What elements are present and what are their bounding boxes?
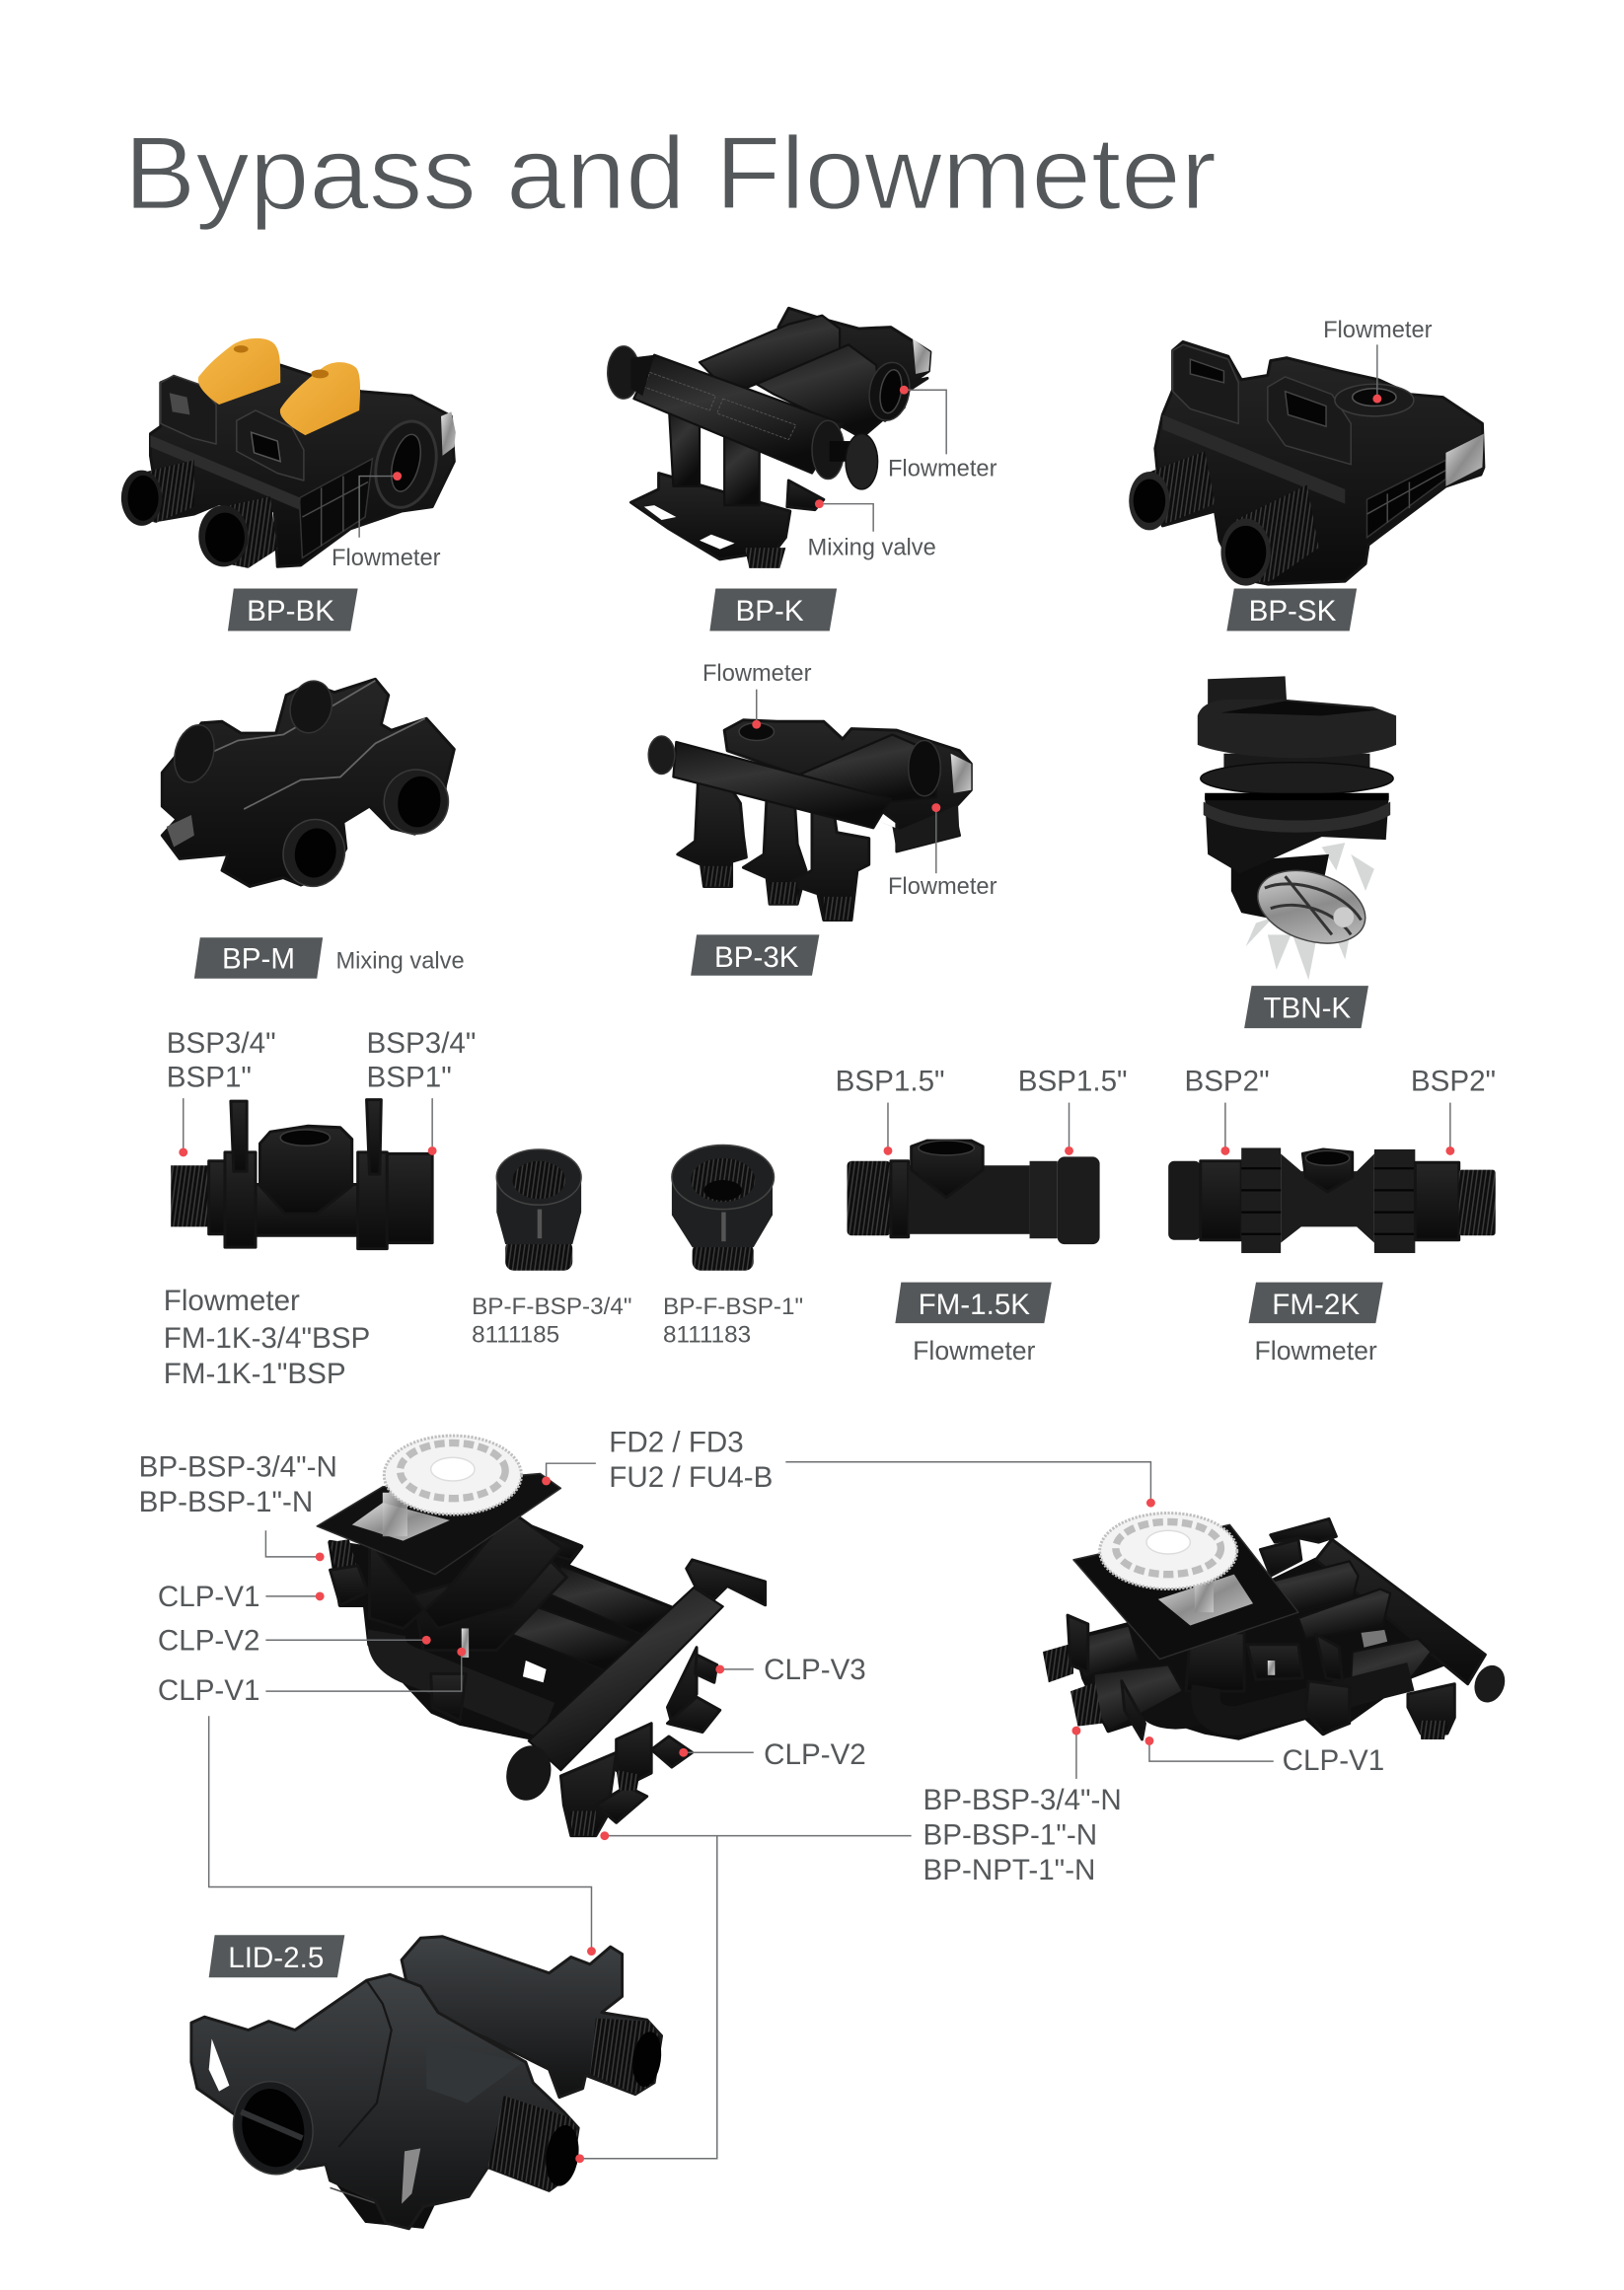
tag: LID-2.5: LID-2.5 — [228, 1942, 324, 1974]
product: right assembly — [1043, 1514, 1510, 1739]
leader: BP-BSP left — [265, 1530, 325, 1561]
labels: BSP2 ports: BSP2" — [1411, 1066, 1496, 1098]
callout: CLP-V2 left — [158, 1625, 431, 1658]
product: main bypass assembly — [317, 1436, 766, 1836]
callout: CLP-V1 lower: CLP-V1 — [158, 1674, 259, 1707]
tag: BP-3K — [691, 934, 819, 976]
leader: main assembly to BP-BSP and LID-2.5 — [575, 1831, 912, 2163]
labels: BSP ports right: BSP3/4" — [367, 1027, 476, 1060]
leader: FM-1.5K left — [884, 1103, 892, 1155]
labels: BP-BSP left — [139, 1451, 337, 1518]
labels: FD2 FU2: FD2 / FD3 — [609, 1426, 744, 1458]
tag: BP-SK — [1226, 589, 1357, 630]
labels: FD2 FU2 — [609, 1426, 773, 1494]
title: Bypass and Flowmeter — [124, 116, 1217, 232]
labels: FD2 FU2: FU2 / FU4-B — [609, 1461, 773, 1494]
callout: BP-SK flowmeter: Flowmeter — [1323, 318, 1433, 343]
labels: FM-1K: FM-1K-3/4"BSP — [164, 1322, 370, 1355]
labels: FM-1K: FM-1K-1"BSP — [164, 1358, 346, 1390]
callout: CLP-V1 upper: CLP-V1 — [158, 1581, 259, 1613]
labels: BSP1.5 ports: BSP1.5" — [1018, 1066, 1128, 1098]
icon: threaded port left — [121, 460, 194, 526]
icon: threaded port right — [1220, 484, 1319, 586]
label: BP-F-BSP-1: 8111183 — [663, 1321, 751, 1348]
product: FM-2K flowmeter — [1168, 1147, 1496, 1253]
leader: CLP-V1 to LID-2.5 — [209, 1716, 596, 1956]
icon: threaded port left — [1129, 451, 1216, 530]
tag: TBN-K — [1244, 986, 1368, 1028]
callout: CLP-V2 right: CLP-V2 — [764, 1738, 866, 1771]
leader: gear plate — [542, 1463, 596, 1485]
label: BP-F-BSP-1: BP-F-BSP-1" — [663, 1293, 803, 1320]
tag: TBN-K: TBN-K — [1263, 993, 1351, 1025]
leader: to right assembly — [785, 1462, 1155, 1508]
tag: BP-BK — [228, 589, 358, 630]
leader: FM-2K left — [1220, 1103, 1229, 1155]
tag: FM-1.5K: FM-1.5K — [919, 1289, 1030, 1321]
tag: BP-M — [194, 937, 323, 979]
labels: FM-1K: Flowmeter — [164, 1285, 300, 1317]
callout: BP-K mixing valve: Mixing valve — [808, 535, 936, 560]
label: mixing valve: Mixing valve — [335, 948, 465, 974]
label: BP-F-BSP-3/4: 8111185 — [472, 1321, 559, 1348]
labels: BSP1.5 ports: BSP1.5" — [836, 1066, 945, 1098]
callout: BP-3K flowmeter top: Flowmeter — [702, 661, 812, 687]
callout: right assembly CLP-V1: CLP-V1 — [1283, 1744, 1384, 1777]
tag: FM-2K: FM-2K — [1272, 1289, 1360, 1321]
labels: BSP ports left — [167, 1027, 276, 1093]
product: BP-F-BSP-3/4 fitting — [496, 1149, 581, 1271]
labels: FM-1K — [164, 1285, 370, 1390]
callout: BP-K flowmeter: Flowmeter — [888, 457, 997, 482]
labels: BP-BSP left: BP-BSP-1"-N — [139, 1486, 313, 1518]
labels: BSP ports right — [367, 1027, 476, 1093]
leader: FM-2K right — [1445, 1103, 1454, 1155]
labels: BSP2 ports — [1184, 1066, 1496, 1098]
label: FM-1.5K flowmeter: Flowmeter — [913, 1336, 1036, 1366]
tag: FM-1.5K — [895, 1283, 1052, 1323]
product: LID-2.5 — [191, 1937, 665, 2229]
leader: FM-1K left port — [179, 1098, 187, 1156]
tag: BP-SK: BP-SK — [1249, 595, 1337, 628]
callout: right assembly CLP-V1 — [1144, 1736, 1384, 1777]
product: FM-1K flowmeter — [171, 1100, 432, 1249]
product: BP-SK bypass — [1129, 341, 1484, 586]
labels: BP-BSP right — [923, 1784, 1122, 1886]
leader: right assembly BP-BSP — [1071, 1727, 1080, 1779]
label: BP-F-BSP-3/4: BP-F-BSP-3/4" — [472, 1293, 631, 1320]
product: BP-F-BSP-1 fitting — [672, 1145, 775, 1271]
callout: BP-3K flowmeter right — [888, 803, 997, 900]
callout: CLP-V1 upper — [158, 1581, 325, 1613]
tag: BP-BK: BP-BK — [247, 595, 334, 628]
label: BP-F-BSP-3/4 — [472, 1293, 631, 1348]
label: BP-F-BSP-1 — [663, 1293, 803, 1348]
tag: LID-2.5 — [209, 1935, 344, 1977]
product: BP-M mixing valve — [162, 676, 454, 892]
icon: white gear right — [1100, 1514, 1237, 1588]
leader: FM-1K right port — [428, 1098, 437, 1155]
labels: BSP ports right: BSP1" — [367, 1061, 452, 1093]
callout: CLP-V3 — [715, 1654, 866, 1686]
callout: BP-K flowmeter — [888, 386, 997, 482]
labels: BSP1.5 ports — [836, 1066, 1128, 1098]
callout: BP-BK flowmeter: Flowmeter — [332, 546, 441, 571]
labels: BP-BSP right: BP-NPT-1"-N — [923, 1854, 1095, 1886]
product: FM-1.5K flowmeter — [848, 1141, 1100, 1244]
labels: BSP ports left: BSP3/4" — [167, 1027, 276, 1060]
icon: yellow handles — [198, 338, 360, 435]
callout: CLP-V1 lower — [158, 1648, 466, 1707]
icon: threaded port right — [198, 496, 277, 568]
labels: BP-BSP right: BP-BSP-1"-N — [923, 1819, 1097, 1852]
labels: BP-BSP right: BP-BSP-3/4"-N — [923, 1784, 1122, 1816]
tag: BP-3K: BP-3K — [714, 941, 799, 974]
callout: CLP-V3: CLP-V3 — [764, 1654, 866, 1686]
labels: BSP ports left: BSP1" — [167, 1061, 252, 1093]
callout: BP-3K flowmeter top — [702, 661, 812, 729]
tag: FM-2K — [1249, 1283, 1383, 1323]
callout: BP-SK flowmeter — [1323, 318, 1433, 404]
label: FM-2K flowmeter: Flowmeter — [1255, 1336, 1377, 1366]
icon: white gear — [384, 1436, 521, 1514]
product: TBN-K turbine — [1198, 676, 1396, 980]
tag: BP-K — [709, 589, 837, 630]
callout: BP-K mixing valve — [808, 499, 936, 560]
callout: BP-3K flowmeter right: Flowmeter — [888, 874, 997, 900]
leader: FM-1.5K right — [1065, 1103, 1073, 1155]
tag: BP-K: BP-K — [736, 595, 804, 628]
product: BP-3K bypass — [648, 720, 971, 921]
callout: BP-BK flowmeter — [332, 472, 441, 571]
callout: CLP-V2 left: CLP-V2 — [158, 1625, 259, 1658]
tag: BP-M: BP-M — [222, 942, 295, 975]
product: BP-K bypass — [608, 308, 930, 568]
labels: BP-BSP left: BP-BSP-3/4"-N — [139, 1451, 337, 1484]
icon: translucent blades — [1246, 843, 1374, 980]
labels: BSP2 ports: BSP2" — [1184, 1066, 1270, 1098]
callout: CLP-V2 right — [679, 1738, 866, 1771]
product: BP-BK bypass — [121, 338, 456, 568]
